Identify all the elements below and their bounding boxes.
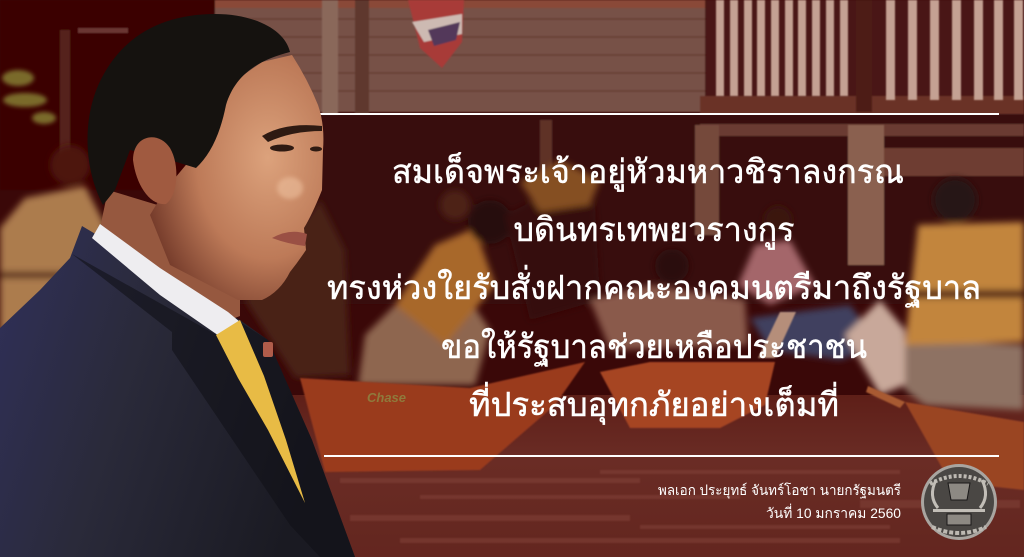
line 3: ทรงห่วงใยรับสั่งฝากคณะองคมนตรีมาถึงรัฐบาล	[327, 265, 981, 308]
top divider line	[320, 113, 999, 115]
mouth	[272, 232, 307, 246]
bottom divider line	[324, 455, 999, 457]
boats	[300, 312, 1024, 490]
icon: government seal	[921, 464, 997, 540]
people in boats	[0, 145, 1024, 410]
ear	[133, 137, 176, 204]
boat lettering: Chase	[367, 390, 406, 405]
date: วันที่ 10 มกราคม 2560	[766, 504, 901, 521]
neck	[100, 190, 240, 322]
line 5: ที่ประสบอุทกภัยอย่างเต็มที่	[469, 382, 839, 425]
face	[150, 55, 323, 300]
main message	[327, 152, 981, 425]
water	[0, 395, 1024, 557]
nose highlight	[277, 177, 303, 199]
house wall	[0, 0, 1024, 304]
line 1: สมเด็จพระเจ้าอยู่หัวมหาวชิราลงกรณ	[392, 152, 904, 192]
speaker name: พลเอก ประยุทธ์ จันทร์โอชา นายกรัฐมนตรี	[658, 482, 901, 499]
seated passengers	[590, 285, 748, 350]
left rescuer	[0, 186, 105, 335]
balustrade	[716, 0, 1023, 100]
tree leaves	[2, 70, 56, 124]
hair	[87, 14, 290, 205]
line 2: บดินทรเทพยวรางกูร	[514, 211, 794, 250]
right rescuer	[845, 300, 905, 395]
bystander behind portrait	[245, 200, 350, 378]
shirt collar	[92, 224, 240, 338]
central rescuer	[358, 300, 490, 385]
eyebrow and eyes	[262, 125, 322, 152]
necktie	[216, 320, 305, 503]
flag	[408, 0, 464, 68]
suit jacket	[0, 226, 355, 557]
line 4: ขอให้รัฐบาลช่วยเหลือประชาชน	[441, 328, 867, 367]
lapel pin	[263, 342, 273, 357]
portrait: man in dark suit	[0, 14, 355, 557]
attribution	[658, 482, 901, 521]
lapel shading	[72, 254, 355, 557]
